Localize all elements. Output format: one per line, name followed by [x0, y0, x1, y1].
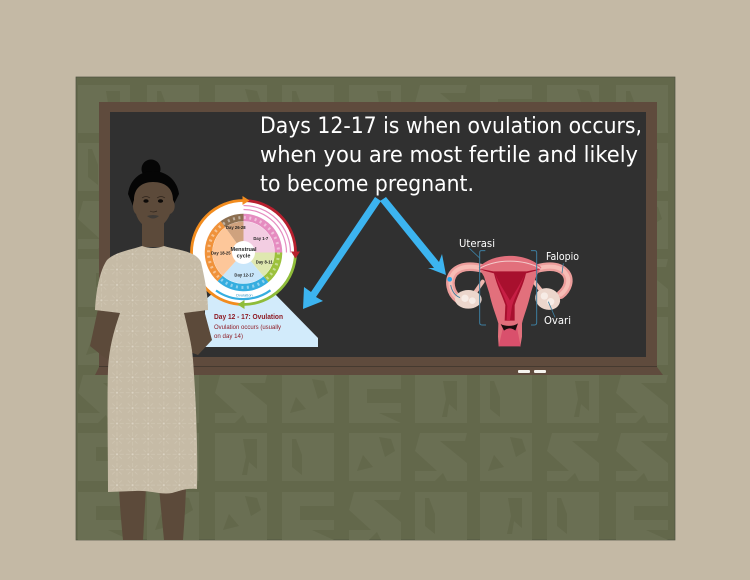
chart: menstrual cycle wheel: Menstrual [231, 247, 257, 253]
heading text on chalkboard [260, 113, 642, 197]
vaginal canal [499, 326, 521, 346]
labels: organ names: Falopio [546, 250, 579, 263]
labels: organ names [459, 237, 579, 327]
callout: ovulation detail: Day 12 - 17: Ovulation [214, 312, 283, 321]
chalk pieces [518, 370, 546, 373]
chart: menstrual cycle wheel: cycle [237, 254, 250, 260]
ovaries [455, 285, 563, 313]
uterus body [479, 256, 541, 346]
heading text on chalkboard: Days 12-17 is when ovulation occurs, [260, 113, 642, 139]
chart: menstrual cycle wheel: Day 8-11 [256, 259, 273, 264]
chart: menstrual cycle wheel: Day 12-17 [234, 273, 255, 278]
neck [142, 220, 164, 247]
heading text on chalkboard: when you are most fertile and likely [260, 142, 638, 168]
chart: menstrual cycle wheel: Ovulation [236, 292, 253, 298]
heading text on chalkboard: to become pregnant. [260, 171, 474, 197]
brackets [480, 251, 537, 325]
face [133, 182, 175, 229]
arrow: to cycle wheel [303, 197, 381, 309]
chalkboard with wooden frame and ledge [95, 102, 663, 375]
label leaders [451, 248, 563, 317]
chart: menstrual cycle wheel: Day 1-7 [253, 236, 269, 241]
callout: ovulation detail [205, 292, 318, 347]
callout: ovulation detail: on day 14) [214, 333, 243, 340]
arms [90, 309, 212, 364]
labels: organ names: Uterasi [459, 237, 495, 250]
chart: menstrual cycle wheel: Day 26-28 [226, 225, 246, 230]
callout: ovulation detail: Ovulation occurs (usually [214, 324, 282, 331]
panel: green classroom wall [76, 77, 675, 540]
diagram: reproductive organs [447, 248, 568, 346]
figure: woman teacher [90, 160, 212, 540]
fallopian tubes [450, 267, 568, 299]
hair and bun [128, 160, 179, 206]
chart: menstrual cycle wheel [190, 196, 300, 309]
uterine cavity [479, 269, 541, 321]
legs [119, 488, 186, 540]
chart: menstrual cycle wheel: Day 18-25 [211, 250, 231, 255]
arrow: to uterus diagram [380, 197, 446, 275]
labels: organ names: Ovari [544, 314, 571, 327]
dress [95, 246, 208, 493]
facial features [142, 196, 165, 218]
